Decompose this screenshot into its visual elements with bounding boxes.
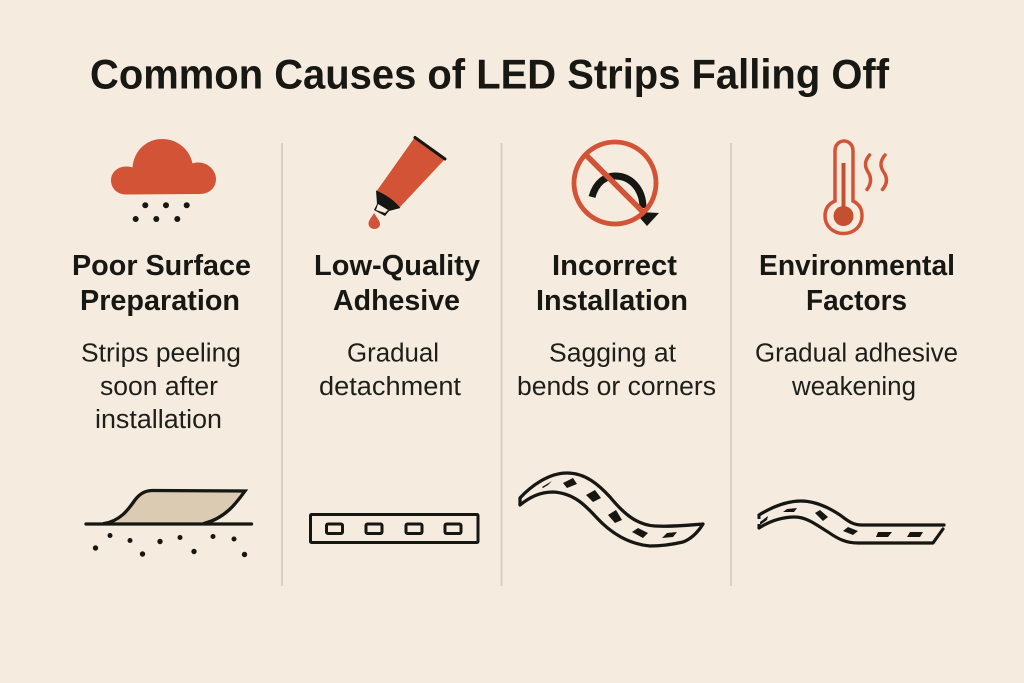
panel: incorrect installation (517, 142, 716, 546)
description: adhesive weakening: Gradual adhesive (755, 340, 958, 368)
description: sagging at bends: Sagging at (549, 340, 676, 368)
description: strips peeling: soon after (100, 373, 219, 401)
heading: poor surface preparation: Preparation (80, 285, 240, 317)
illustration: sagging strip (520, 473, 703, 546)
title: Common Causes of LED Strips Falling Off (90, 50, 889, 98)
illustration: weakened strip (759, 501, 944, 543)
illustration: strip peeling off dusty surface (86, 490, 252, 557)
description: sagging at bends (517, 340, 716, 401)
heading: poor surface preparation: Poor Surface (72, 250, 251, 282)
heading: incorrect installation (536, 250, 688, 317)
description: sagging at bends: bends or corners (517, 373, 716, 401)
heading: low-quality adhesive: Low-Quality (314, 250, 480, 282)
description: strips peeling: installation (95, 406, 222, 434)
heading: environmental factors: Factors (806, 285, 907, 317)
heading: incorrect installation: Installation (536, 285, 688, 317)
heading: low-quality adhesive (314, 250, 480, 317)
icon: adhesive tube (368, 137, 445, 229)
heading: environmental factors: Environmental (759, 250, 955, 282)
icon: no sharp bending (574, 142, 659, 226)
heading: poor surface preparation (72, 250, 251, 317)
description: strips peeling: Strips peeling (81, 340, 241, 368)
icon: thermometer with heat waves (825, 141, 886, 234)
heading: incorrect installation: Incorrect (552, 250, 677, 282)
heading: low-quality adhesive: Adhesive (333, 285, 460, 317)
description: gradual detachment: detachment (319, 373, 461, 401)
icon: cloud with dust (111, 139, 216, 222)
description: gradual detachment (319, 340, 461, 401)
panel: low-quality adhesive (310, 137, 480, 542)
description: adhesive weakening: weakening (791, 373, 916, 401)
description: adhesive weakening (755, 340, 958, 401)
panel: poor surface preparation (72, 139, 252, 557)
panel: environmental factors (755, 141, 958, 543)
description: gradual detachment: Gradual (347, 340, 439, 368)
heading: environmental factors (759, 250, 955, 317)
illustration: flat LED strip (310, 514, 478, 542)
description: strips peeling (81, 340, 241, 434)
